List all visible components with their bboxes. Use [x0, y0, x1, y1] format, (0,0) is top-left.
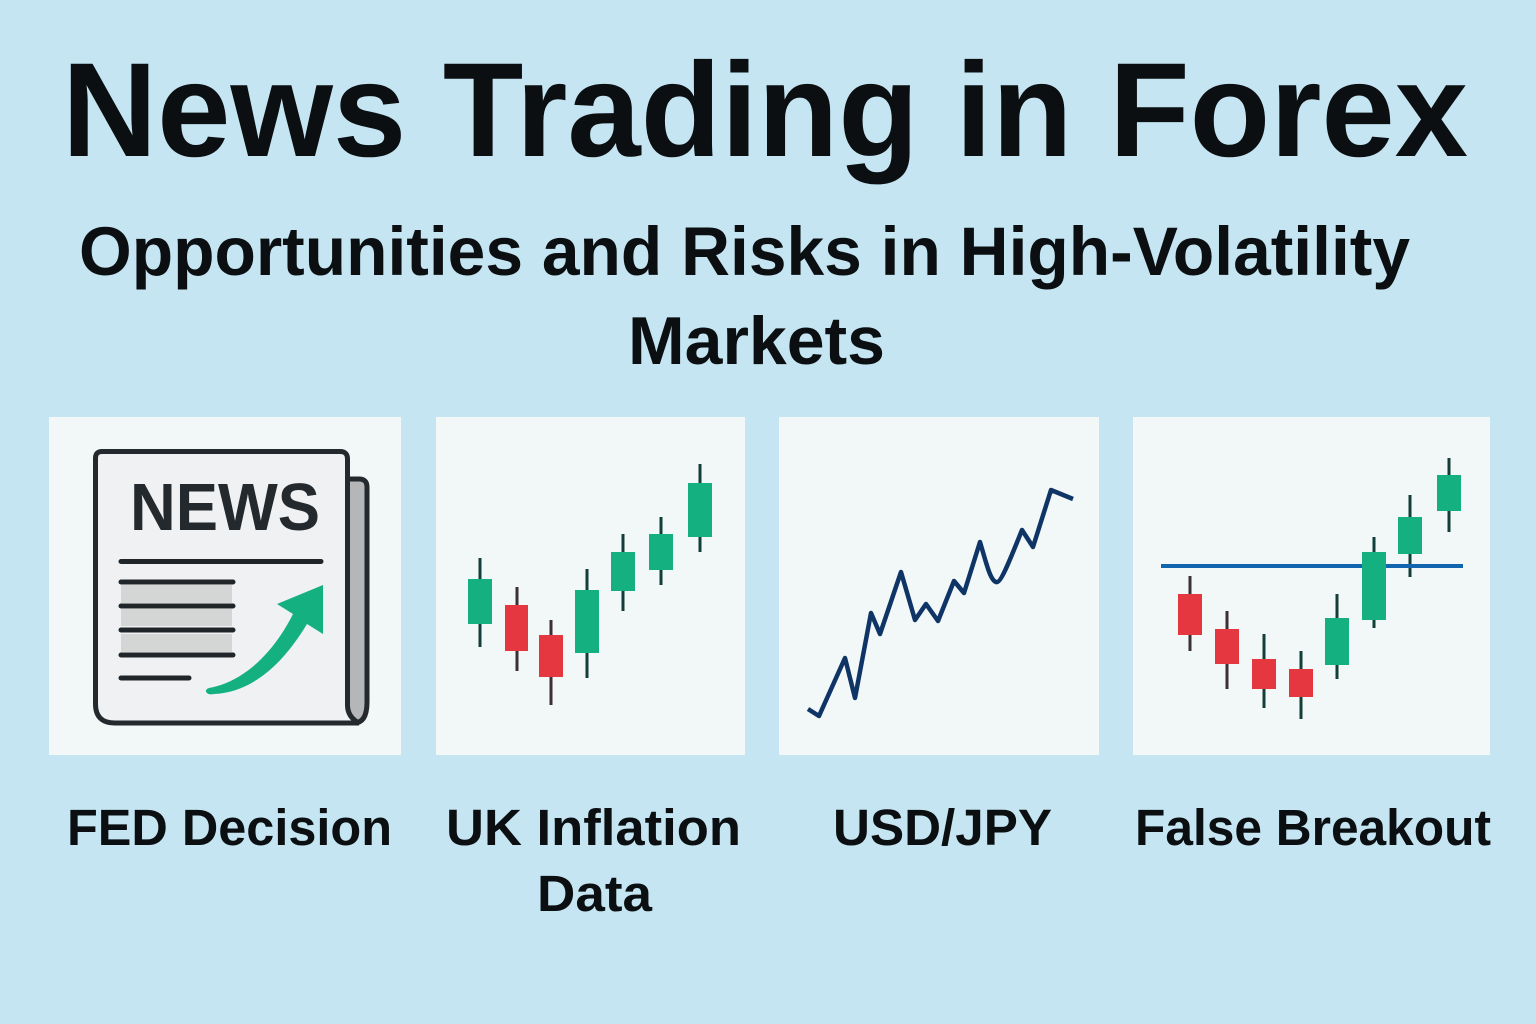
- breakout level: [1161, 564, 1463, 568]
- green arrow: [206, 585, 323, 694]
- NEWS heading: NEWS: [130, 470, 320, 545]
- label: False Breakout: False Breakout: [1135, 799, 1491, 856]
- label: UK Inflation Data: [446, 799, 741, 922]
- subtitle: [79, 213, 1410, 379]
- label: USD/JPY: USD/JPY: [833, 799, 1052, 856]
- candles: [468, 483, 712, 677]
- candles: [1178, 475, 1461, 697]
- panel: line chart: [779, 417, 1099, 755]
- price line: [808, 490, 1073, 716]
- text lines: [121, 562, 321, 678]
- title: News Trading in Forex: [62, 36, 1468, 185]
- wicks: [480, 464, 700, 705]
- newspaper page: [96, 452, 359, 723]
- panel: news icon: [49, 417, 401, 755]
- label: UK Inflation Data: UK Inflation: [446, 799, 741, 856]
- back page: [339, 479, 367, 723]
- panel: candlestick chart: [436, 417, 745, 755]
- wicks: [1190, 458, 1449, 719]
- label: FED Decision: FED Decision: [67, 799, 392, 856]
- subtitle: Markets: [628, 303, 885, 379]
- label: UK Inflation Data: Data: [537, 865, 653, 922]
- panel: false breakout chart: [1133, 417, 1490, 755]
- subtitle: Opportunities and Risks in High-Volatility: [79, 213, 1410, 290]
